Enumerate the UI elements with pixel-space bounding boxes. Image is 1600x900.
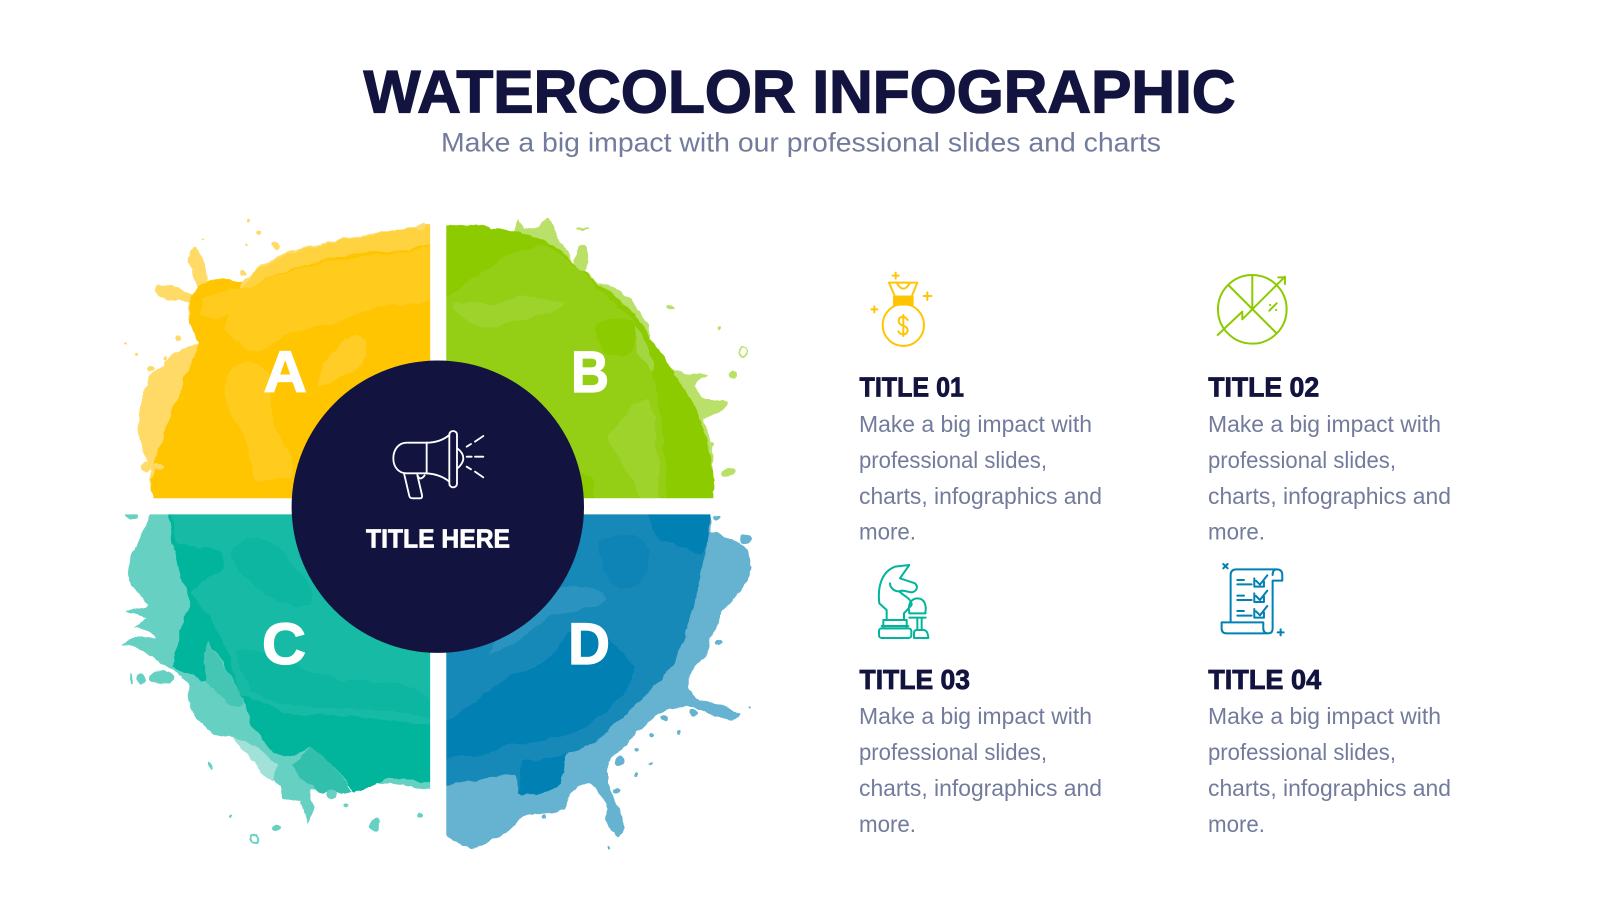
- letter D: D: [568, 612, 610, 677]
- quadrant B: green splash: [444, 219, 747, 504]
- icon: megaphone: [393, 431, 483, 498]
- text: description 04: charts, infographics and: [1208, 775, 1451, 801]
- quadrant C: teal splash: [122, 508, 433, 843]
- title: WATERCOLOR INFOGRAPHIC: [364, 59, 1236, 126]
- heading: title 01: TITLE 01: [860, 372, 964, 403]
- text: description 01: charts, infographics and: [859, 483, 1102, 509]
- text: description 04: more.: [1208, 811, 1265, 837]
- icon: chess knight and pawn: [879, 565, 928, 638]
- subtitle: Make a big impact with our professional slides and charts: [441, 128, 1161, 158]
- icon: money bag: [871, 273, 931, 346]
- heading: title 02: TITLE 02: [1208, 372, 1319, 403]
- text: description 03: more.: [859, 811, 916, 837]
- letter C: C: [262, 612, 306, 677]
- text: description 01: [859, 411, 1102, 544]
- center title: TITLE HERE: [366, 524, 510, 554]
- text: description 02: more.: [1208, 518, 1265, 544]
- text: description 01: professional slides,: [859, 447, 1047, 473]
- heading: title 04: TITLE 04: [1208, 664, 1322, 695]
- text: description 03: Make a big impact with: [859, 703, 1092, 729]
- text: description 04: professional slides,: [1208, 739, 1396, 765]
- heading: title 03: TITLE 03: [860, 664, 970, 695]
- quadrant D: blue splash: [436, 508, 752, 849]
- icon: checklist scroll: [1222, 564, 1284, 635]
- icon: pie chart with arrow: [1218, 275, 1287, 344]
- text: description 03: charts, infographics and: [859, 775, 1102, 801]
- text: description 04: [1208, 703, 1451, 837]
- text: description 01: Make a big impact with: [859, 411, 1092, 437]
- watercolor quadrant chart: [122, 218, 752, 849]
- text: description 02: [1208, 411, 1451, 544]
- quadrant A: yellow splash: [124, 218, 433, 504]
- text: description 02: professional slides,: [1208, 447, 1396, 473]
- text: description 02: Make a big impact with: [1208, 411, 1441, 437]
- text: description 03: professional slides,: [859, 739, 1047, 765]
- text: description 03: [859, 703, 1102, 837]
- letter A: A: [264, 340, 307, 405]
- center circle: [292, 360, 584, 653]
- text: description 02: charts, infographics and: [1208, 483, 1451, 509]
- text: description 04: Make a big impact with: [1208, 703, 1441, 729]
- letter B: B: [571, 340, 609, 405]
- text: description 01: more.: [859, 518, 916, 544]
